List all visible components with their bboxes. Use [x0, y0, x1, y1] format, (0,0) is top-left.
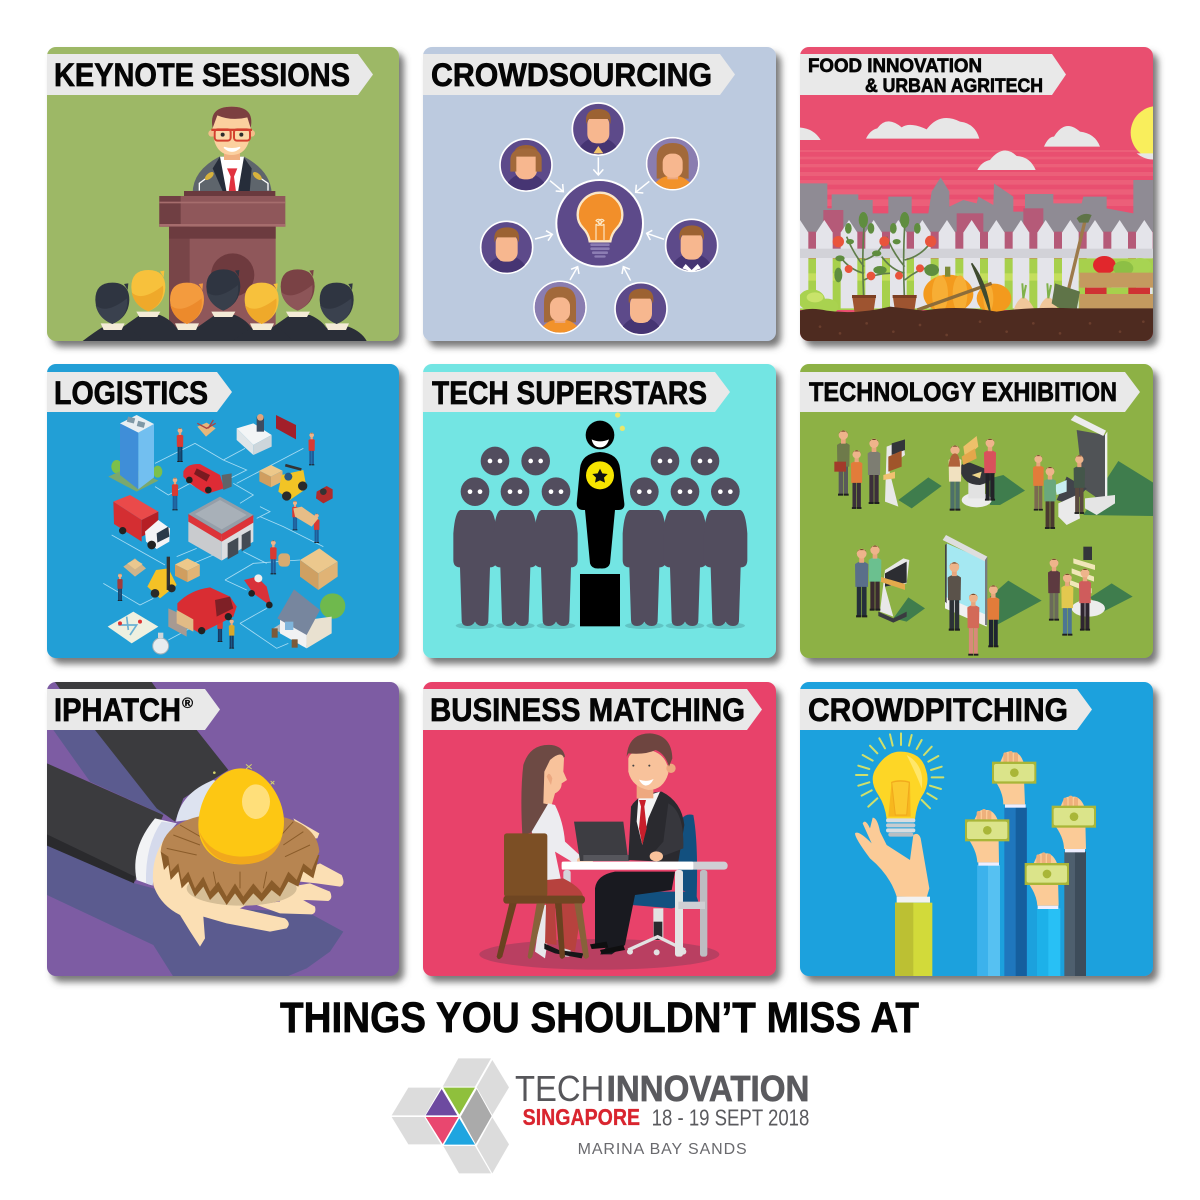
illustration: people feeding ideas into light bulb: [481, 103, 718, 335]
logo: Tech Innovation Singapore: [392, 1058, 809, 1173]
banner: business matching: BUSINESS MATCHING: [430, 692, 745, 728]
panel: iphatch: [47, 682, 399, 977]
illustration: isometric logistics network: [103, 414, 345, 654]
logo wordmark bold: INNOVATION: [607, 1068, 809, 1109]
panel background: blue: [47, 364, 399, 658]
panel background: crimson: [423, 682, 776, 976]
panel: keynote sessions: [47, 47, 399, 341]
logo venue: MARINA BAY SANDS: [578, 1141, 747, 1158]
banner: iphatch: ®: [182, 695, 193, 712]
panel: technology exhibition: [800, 364, 1153, 658]
panel: tech superstars: [423, 364, 776, 658]
panel background: pale blue: [423, 47, 776, 341]
banner: food innovation and urban agritech: [800, 54, 1066, 97]
icon: hexagonal cube mark: [392, 1058, 509, 1173]
banner: technology exhibition: [800, 372, 1140, 412]
banner: keynote sessions: KEYNOTE SESSIONS: [54, 57, 350, 93]
banner: crowdsourcing: CROWDSOURCING: [431, 57, 712, 93]
panel background: pink sky: [800, 47, 1153, 341]
panel: logistics: [47, 364, 399, 658]
title: THINGS YOU SHOULDN’T MISS AT: [280, 994, 919, 1042]
logo location: SINGAPORE: [523, 1104, 640, 1130]
panel background: bright blue: [800, 682, 1153, 976]
illustration: business meeting at a desk: [479, 733, 728, 970]
panel: crowdpitching: [800, 682, 1153, 978]
illustration: speaker at podium with audience: [83, 107, 367, 341]
panel background: green: [47, 47, 399, 341]
banner: food innovation and urban agritech: & URBAN AGRITECH: [865, 75, 1043, 97]
illustration: isometric exhibition booths: [834, 415, 1153, 656]
panel: business matching: [423, 682, 776, 976]
banner: logistics: LOGISTICS: [54, 375, 208, 411]
illustration: star figure standing above the crowd: [453, 412, 747, 629]
banner: iphatch: IPHATCH: [54, 692, 181, 728]
banner: technology exhibition: TECHNOLOGY EXHIBITION: [809, 377, 1117, 407]
panel background: green: [800, 364, 1153, 658]
panel: food innovation and urban agritech: [792, 47, 1184, 343]
illustration: hand holding bulb with investors' hands holding cash: [855, 733, 1096, 978]
logo dates: 18 - 19 SEPT 2018: [652, 1104, 809, 1130]
banner: tech superstars: TECH SUPERSTARS: [432, 375, 707, 411]
banner: crowdpitching: CROWDPITCHING: [808, 692, 1068, 728]
panel background: turquoise: [423, 364, 776, 658]
logo wordmark: TECH: [515, 1068, 604, 1109]
banner: food innovation and urban agritech: FOOD INNOVATION: [808, 55, 982, 77]
panel: crowdsourcing: [423, 47, 776, 341]
illustration: hand holding golden egg in nest: [47, 682, 343, 977]
illustration: urban garden with fence and skyline: [800, 106, 1153, 341]
panel background: purple: [47, 682, 399, 976]
